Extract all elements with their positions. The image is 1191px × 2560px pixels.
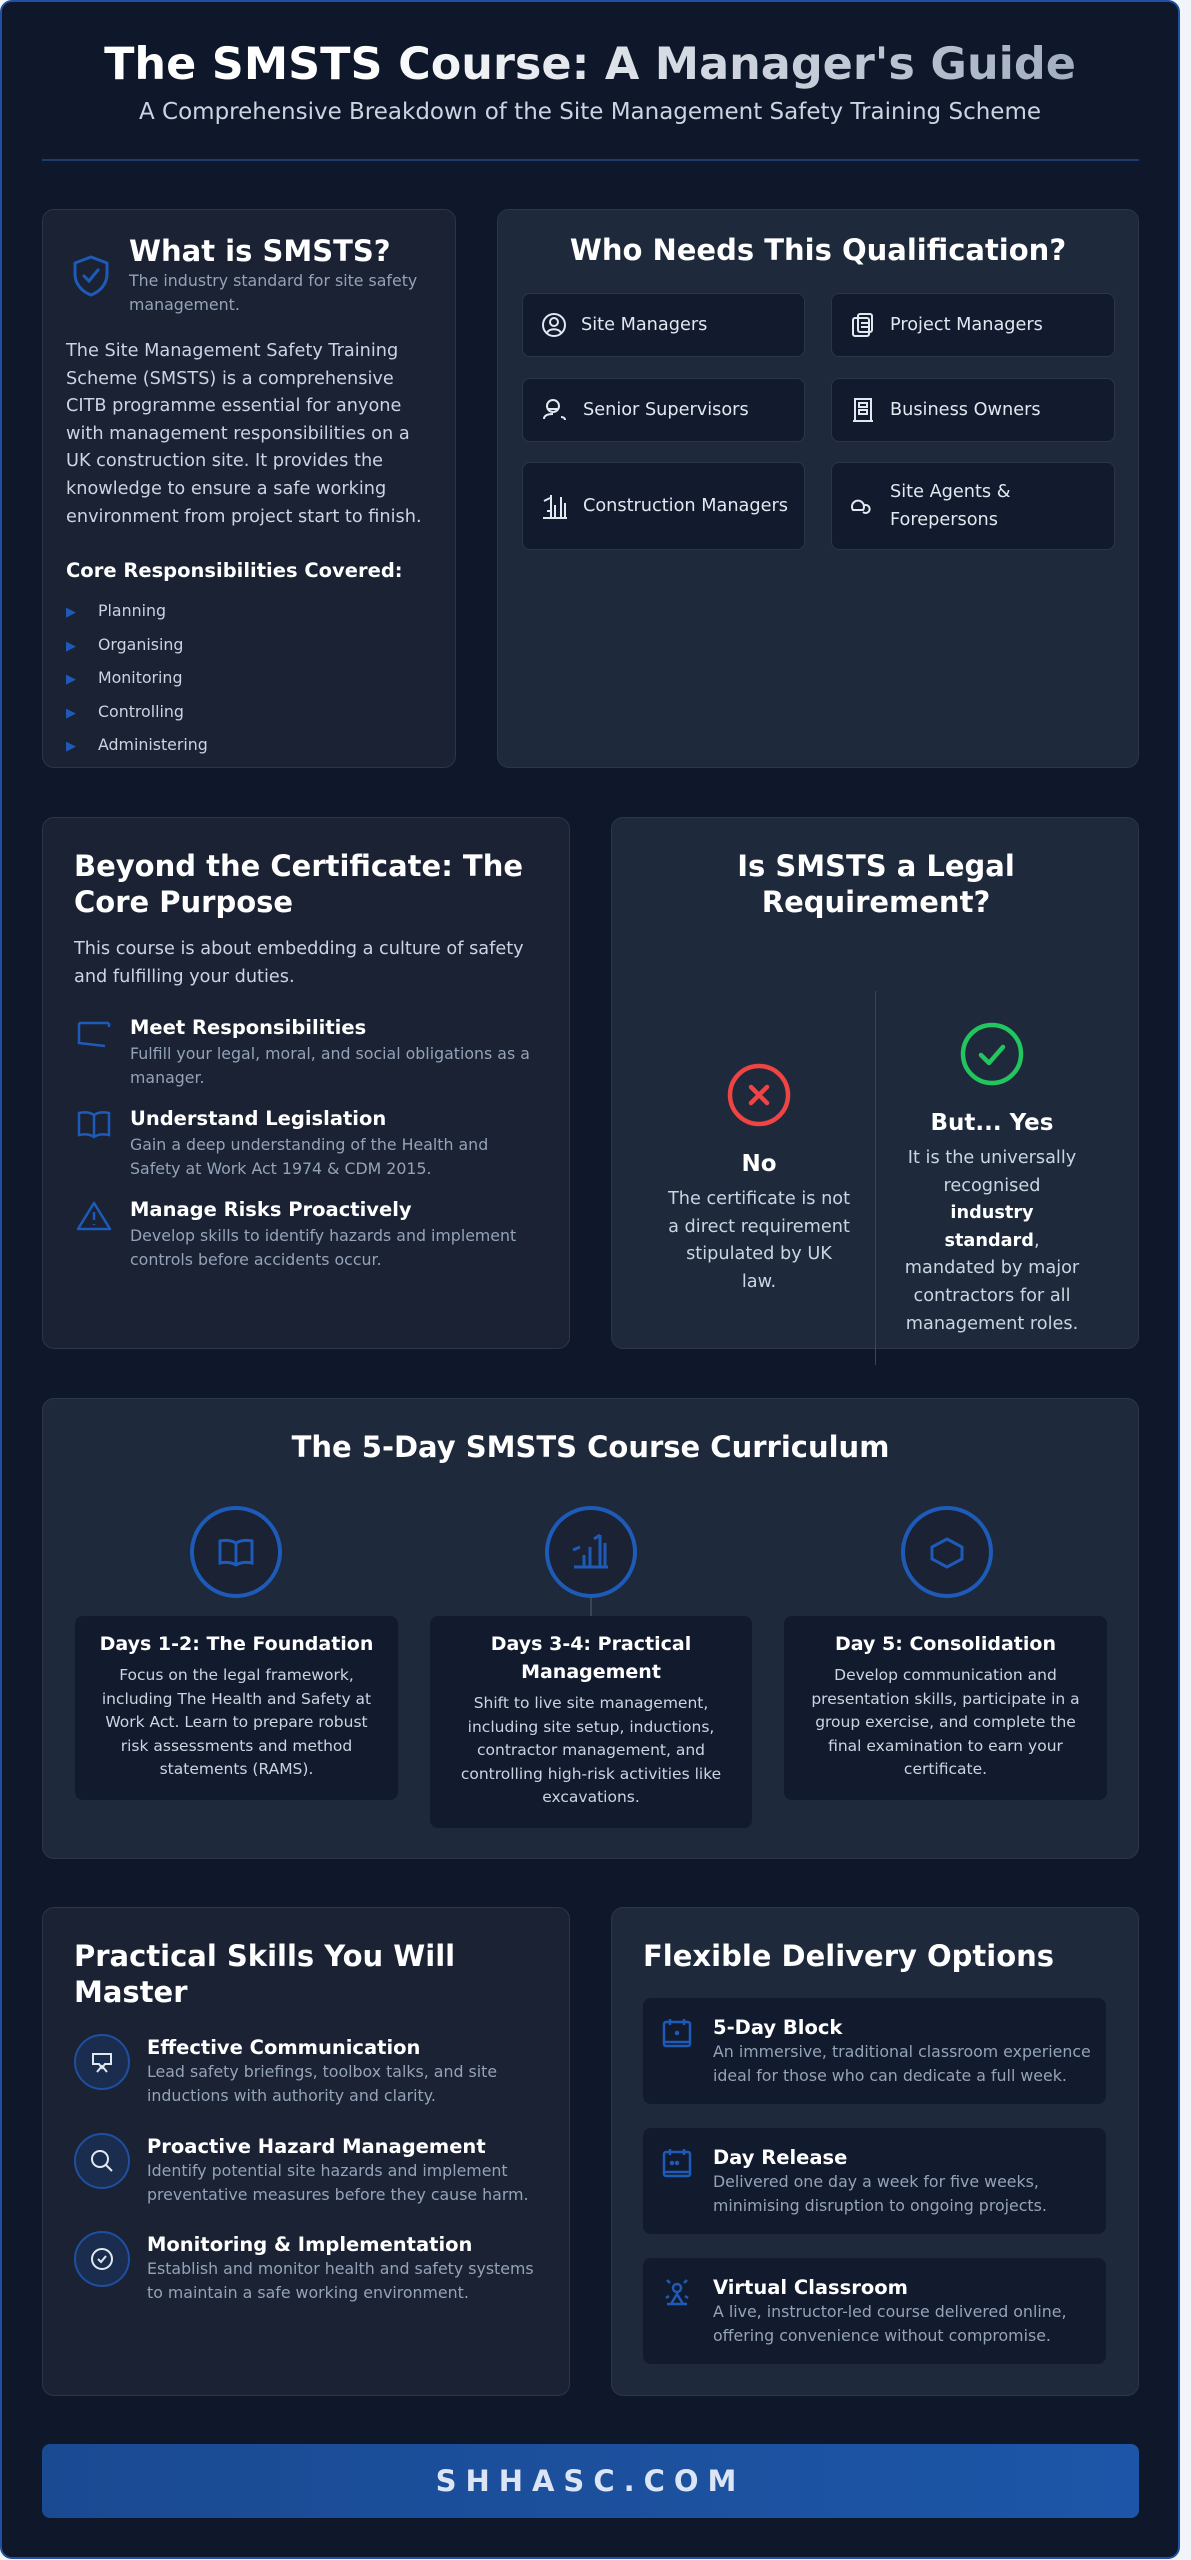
panel: delivery options bbox=[611, 1907, 1139, 2396]
card: construction managers bbox=[522, 462, 805, 550]
item: meet responsibilities: Fulfill your legal, moral, and social obligations as a manager. bbox=[130, 1044, 530, 1086]
card: day 5: Develop communication and presentation skills, participate in a group exercise, and complete the final examination to earn your certificate. bbox=[811, 1666, 1080, 1778]
card: days 1-2 bbox=[75, 1616, 398, 1800]
card: construction managers: Construction Managers bbox=[583, 496, 788, 516]
heading: Who Needs This Qualification? bbox=[570, 233, 1066, 267]
column: no: law. bbox=[742, 1272, 776, 1292]
skill: monitoring bbox=[74, 2231, 534, 2302]
skill: monitoring: Monitoring & Implementation bbox=[147, 2233, 472, 2256]
panel: practical skills bbox=[42, 1907, 570, 2396]
column: no bbox=[668, 1064, 850, 1292]
card: project managers bbox=[831, 293, 1115, 357]
option: 5-day block bbox=[643, 1998, 1106, 2104]
column: yes: It is the universally recognised industry standard, mandated by major contractors for all management roles. bbox=[905, 1148, 1079, 1334]
heading: Beyond the Certificate: The Core Purpose bbox=[74, 849, 523, 919]
card: site agents: Site Agents & bbox=[890, 482, 1011, 502]
card: business owners: Business Owners bbox=[890, 400, 1041, 420]
item: manage risks bbox=[76, 1198, 516, 1268]
list: Organising bbox=[98, 634, 183, 654]
panel: who needs bbox=[497, 209, 1139, 768]
list bbox=[66, 601, 208, 754]
item: understand legislation bbox=[78, 1107, 488, 1178]
card: days 1-2: Days 1-2: The Foundation bbox=[100, 1633, 373, 1655]
icon: shield bbox=[74, 256, 108, 296]
item: understand legislation: Understand Legislation bbox=[130, 1107, 386, 1130]
icon: book circle bbox=[190, 1506, 282, 1598]
option: day release: Delivered one day a week for five weeks, minimising disruption to ongoing projects. bbox=[713, 2172, 1047, 2215]
heading: Practical Skills You Will Master bbox=[74, 1939, 455, 2009]
skill: hazard: Proactive Hazard Management bbox=[147, 2135, 486, 2158]
option: day release: Day Release bbox=[713, 2146, 847, 2169]
title: The SMSTS Course: A Manager's Guide bbox=[104, 39, 1076, 90]
card: day 5: Day 5: Consolidation bbox=[835, 1633, 1056, 1655]
footer banner bbox=[42, 2444, 1139, 2518]
card: day 5 bbox=[784, 1616, 1107, 1800]
title bbox=[0, 30, 1180, 100]
heading: Flexible Delivery Options bbox=[643, 1939, 1054, 1973]
list: Monitoring bbox=[98, 668, 182, 687]
list: ▶ bbox=[66, 672, 76, 687]
footer banner: SHHASC.COM bbox=[436, 2464, 745, 2498]
card: project managers: Project Managers bbox=[890, 315, 1043, 335]
skill: communication: Effective Communication bbox=[147, 2036, 420, 2059]
option: 5-day block: 5-Day Block bbox=[713, 2016, 842, 2039]
item: meet responsibilities: Meet Responsibilities bbox=[130, 1016, 366, 1039]
skill: communication bbox=[74, 2034, 497, 2104]
column: no: The certificate is not a direct requirement stipulated by UK bbox=[668, 1189, 850, 1264]
card: senior supervisors bbox=[522, 378, 805, 442]
card: business owners bbox=[831, 378, 1115, 442]
item: understand legislation: Gain a deep understanding of the Health and Safety at Work Act 1974 & CDM 2015. bbox=[130, 1135, 488, 1178]
icon: red cross bbox=[728, 1064, 790, 1126]
card: site managers bbox=[522, 293, 805, 357]
list: ▶ bbox=[66, 605, 76, 620]
panel: legal requirement bbox=[611, 817, 1139, 1349]
card: days 3-4 bbox=[430, 1616, 752, 1828]
option: virtual classroom: A live, instructor-led course delivered online, offering convenience without compromise. bbox=[713, 2302, 1066, 2345]
panel: what is SMSTS bbox=[42, 209, 456, 768]
heading: The 5-Day SMSTS Course Curriculum bbox=[292, 1430, 889, 1464]
card: site agents bbox=[831, 462, 1115, 550]
core responsibilities heading: Core Responsibilities Covered: bbox=[66, 559, 403, 582]
icon: book bbox=[78, 1111, 110, 1138]
description: The Site Management Safety Training Scheme (SMSTS) is a comprehensive CITB programme essential for anyone with management responsibilities on a UK construction site. It provides the knowledge to ensure a safe working environment from project start to finish. bbox=[66, 341, 422, 527]
card: days 3-4: Shift to live site management, including site setup, inductions, contractor management, and controlling high-risk activities like excavations. bbox=[461, 1694, 721, 1806]
icon: green check bbox=[960, 1022, 1024, 1086]
icon: graduation circle bbox=[901, 1506, 993, 1598]
heading: What is SMSTS? bbox=[129, 234, 391, 268]
card: site agents: Forepersons bbox=[890, 510, 998, 530]
icon: warning bbox=[76, 1202, 112, 1230]
skill: communication: Lead safety briefings, toolbox talks, and site inductions with authority and clarity. bbox=[147, 2062, 497, 2104]
list: Administering bbox=[98, 735, 208, 754]
column: yes bbox=[905, 1022, 1080, 1334]
card: senior supervisors: Senior Supervisors bbox=[583, 400, 749, 420]
panel: curriculum bbox=[42, 1398, 1139, 1859]
skill: monitoring: Establish and monitor health and safety systems to maintain a safe working environment. bbox=[147, 2259, 534, 2302]
list: ▶ bbox=[66, 638, 76, 654]
option: virtual classroom bbox=[643, 2258, 1106, 2364]
card: site managers: Site Managers bbox=[581, 315, 707, 335]
card: days 3-4: Days 3-4: Practical Management bbox=[491, 1633, 691, 1683]
item: meet responsibilities bbox=[78, 1016, 530, 1086]
skill: hazard: Identify potential site hazards and implement preventative measures before they cause harm. bbox=[147, 2161, 528, 2204]
heading: Is SMSTS a Legal Requirement? bbox=[737, 849, 1015, 919]
list: ▶ bbox=[66, 739, 76, 754]
option: virtual classroom: Virtual Classroom bbox=[713, 2276, 908, 2299]
option: 5-day block: An immersive, traditional classroom experience ideal for those who can dedicate a full week. bbox=[713, 2042, 1091, 2085]
tagline: The industry standard for site safety management. bbox=[129, 271, 417, 314]
item: manage risks: Manage Risks Proactively bbox=[130, 1198, 412, 1221]
skill: hazard bbox=[74, 2133, 528, 2204]
list: ▶ bbox=[66, 706, 76, 720]
item: manage risks: Develop skills to identify hazards and implement controls before accidents occur. bbox=[130, 1226, 516, 1268]
list: Controlling bbox=[98, 702, 184, 720]
icon: construction circle bbox=[545, 1506, 637, 1598]
column: no: No bbox=[741, 1151, 777, 1177]
option: day release bbox=[643, 2128, 1106, 2234]
panel: core purpose bbox=[42, 817, 570, 1349]
icon: scroll bbox=[78, 1022, 110, 1048]
list: Planning bbox=[98, 601, 166, 620]
column: yes: But... Yes bbox=[931, 1110, 1053, 1136]
card: days 1-2: Focus on the legal framework, including The Health and Safety at Work Act. Learn to prepare robust risk assessments and method statements (RAMS). bbox=[102, 1666, 371, 1778]
intro: This course is about embedding a culture of safety and fulfilling your duties. bbox=[74, 939, 524, 987]
subtitle: A Comprehensive Breakdown of the Site Management Safety Training Scheme bbox=[139, 99, 1041, 125]
